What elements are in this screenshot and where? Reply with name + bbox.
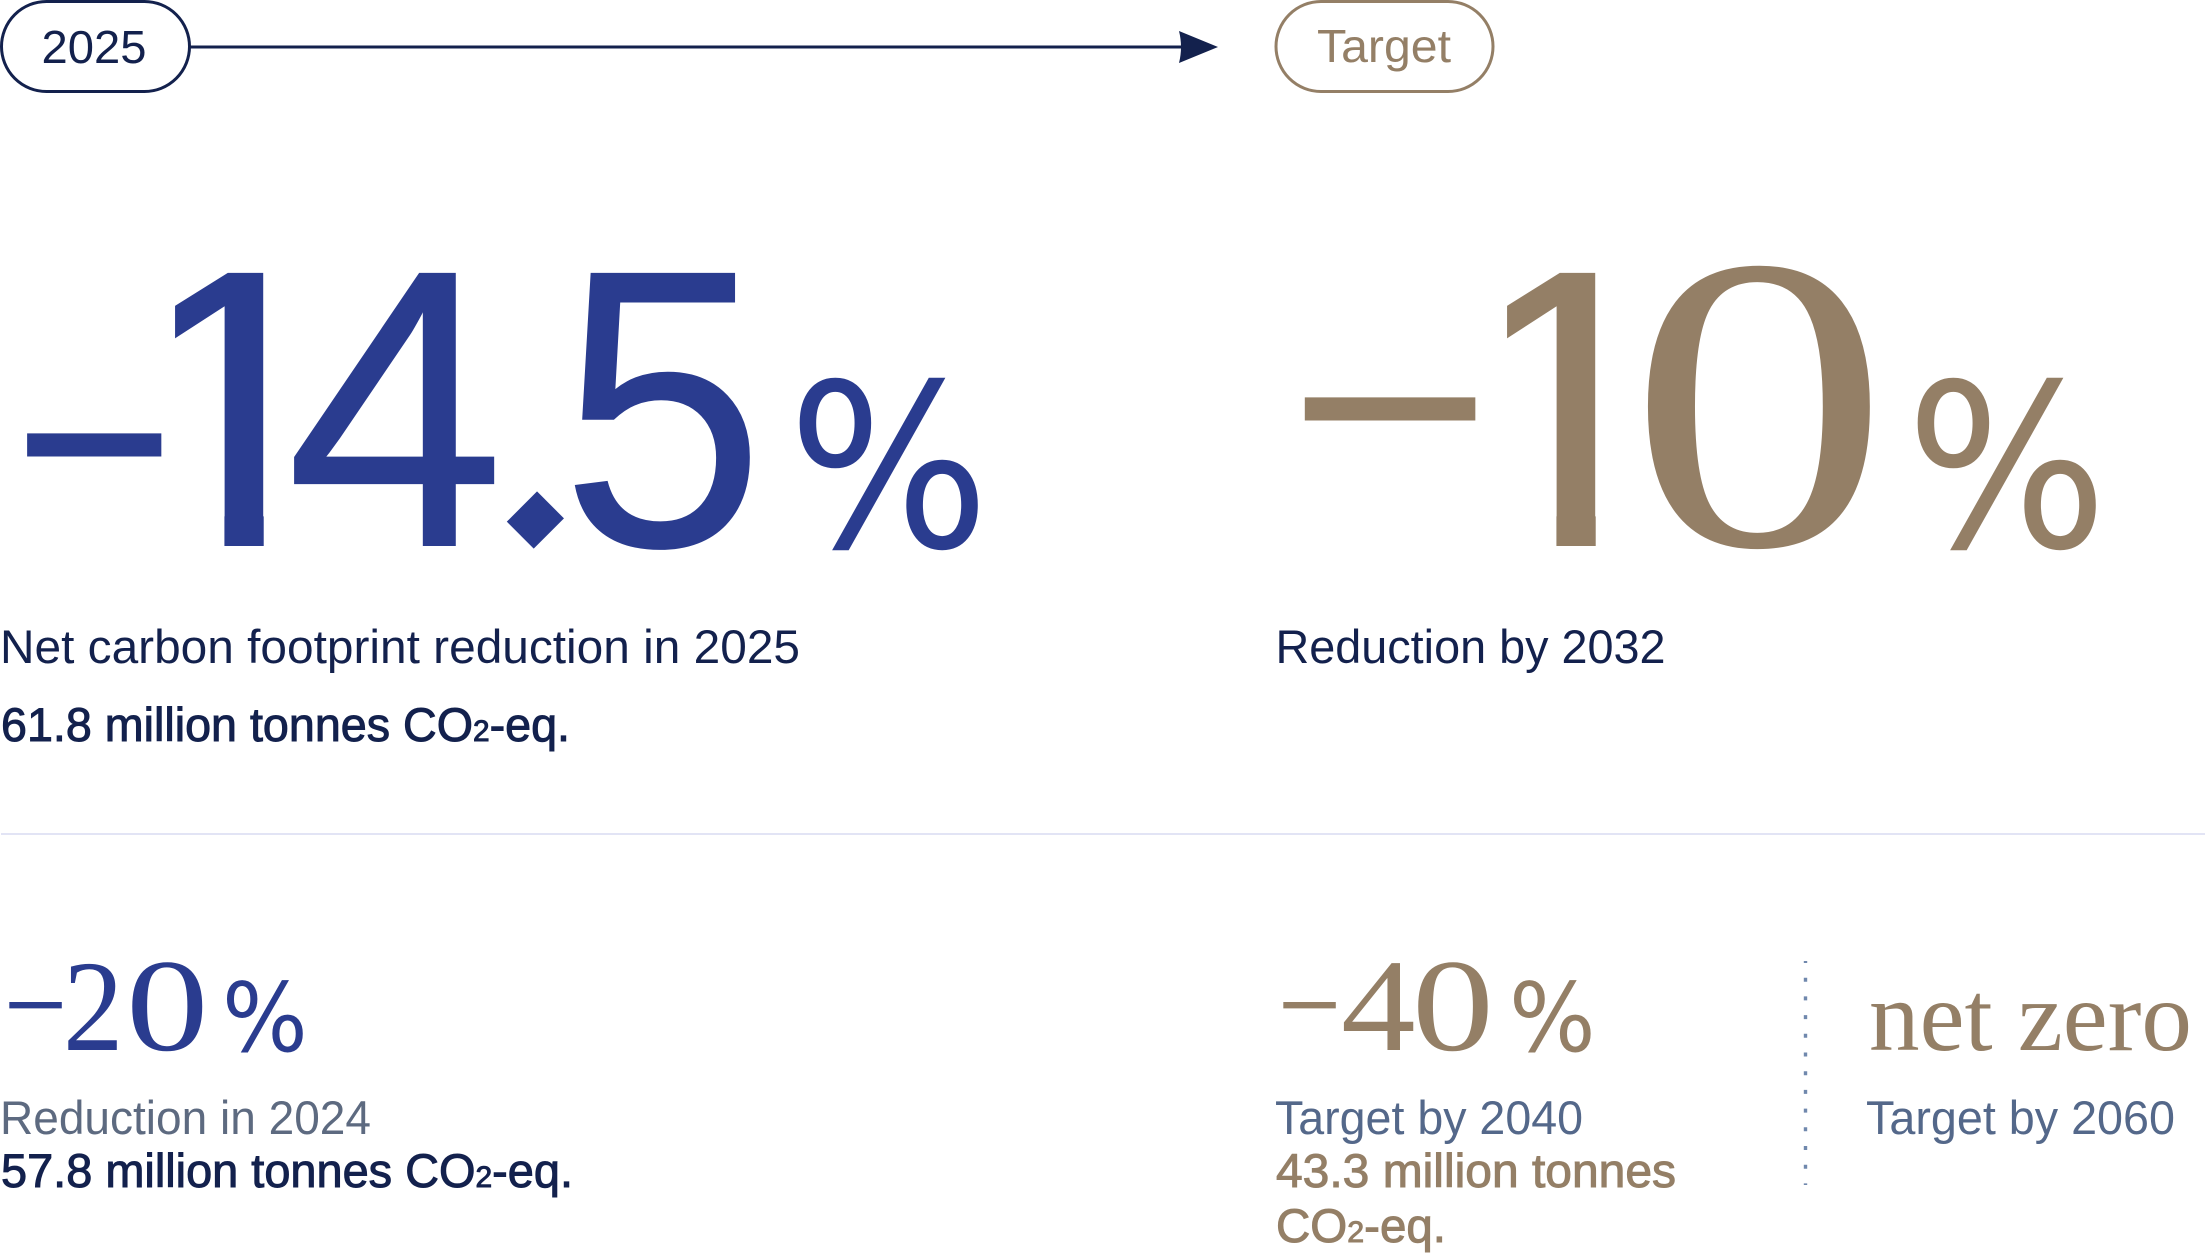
timeline header	[2, 2, 1493, 92]
number: -40%: 0	[1412, 934, 1494, 1079]
number: -20%: −	[4, 954, 67, 1055]
big number: -10%: 0	[1628, 171, 1890, 636]
big number: -14.5%: .	[421, 240, 816, 635]
number: -40%	[1278, 933, 1596, 1079]
pill: target: Target	[1317, 20, 1451, 72]
panel: 2032 target	[1279, 266, 2096, 673]
number: -20%: %	[222, 963, 308, 1074]
panel: 2040 target	[1275, 933, 1676, 1252]
big number: -10%: %	[1906, 336, 2107, 601]
panel: 2060 target	[1866, 961, 2192, 1144]
caption: CO2-eq: CO2-eq.	[1276, 1199, 1446, 1252]
number: -40%: %	[1509, 963, 1596, 1073]
heading: net zero: net zero	[1869, 961, 2192, 1072]
big number: -14.5%: 4	[285, 188, 506, 631]
big number: -14.5%	[27, 272, 978, 550]
pill: 2025	[2, 2, 190, 92]
divider	[1, 833, 2205, 835]
caption: net carbon footprint: Net carbon footprint reduction in 2025	[0, 620, 800, 673]
caption: reduction by 2032: Reduction by 2032	[1276, 620, 1666, 673]
caption: target by 2060: Target by 2060	[1866, 1091, 2175, 1144]
big number: -14.5%: 1	[115, 187, 358, 631]
caption: 57.8 million tonnes: 57.8 million tonnes CO2-eq.	[1, 1144, 573, 1197]
number: -40%: −	[1278, 954, 1341, 1055]
caption: 43.3 million tonnes: 43.3 million tonnes	[1276, 1144, 1676, 1197]
number: -20%: 0	[126, 933, 208, 1079]
pill: 2025: 2025	[42, 21, 146, 73]
arrow: 2025 to target	[190, 31, 1218, 63]
big number: -14.5%: −	[14, 259, 175, 622]
big number: -10%	[1304, 266, 2096, 550]
big number: -14.5%: %	[788, 336, 989, 601]
caption: reduction in 2024: Reduction in 2024	[0, 1091, 371, 1144]
number: -40%: 4	[1341, 933, 1416, 1079]
big number: -14.5%: 5	[560, 188, 765, 631]
panel: 2024 result	[0, 933, 573, 1197]
number: -20%	[4, 933, 308, 1079]
pill: target	[1276, 2, 1493, 92]
number: -20%: 2	[63, 935, 123, 1079]
dotted separator	[1804, 961, 1807, 1185]
caption: target by 2040: Target by 2040	[1275, 1091, 1583, 1144]
caption: 61.8 million tonnes: 61.8 million tonnes CO2-eq.	[1, 698, 570, 751]
panel: 2025 result	[2, 272, 978, 752]
big number: -10%: −	[1288, 223, 1492, 586]
big number: -10%: 1	[1447, 187, 1690, 631]
